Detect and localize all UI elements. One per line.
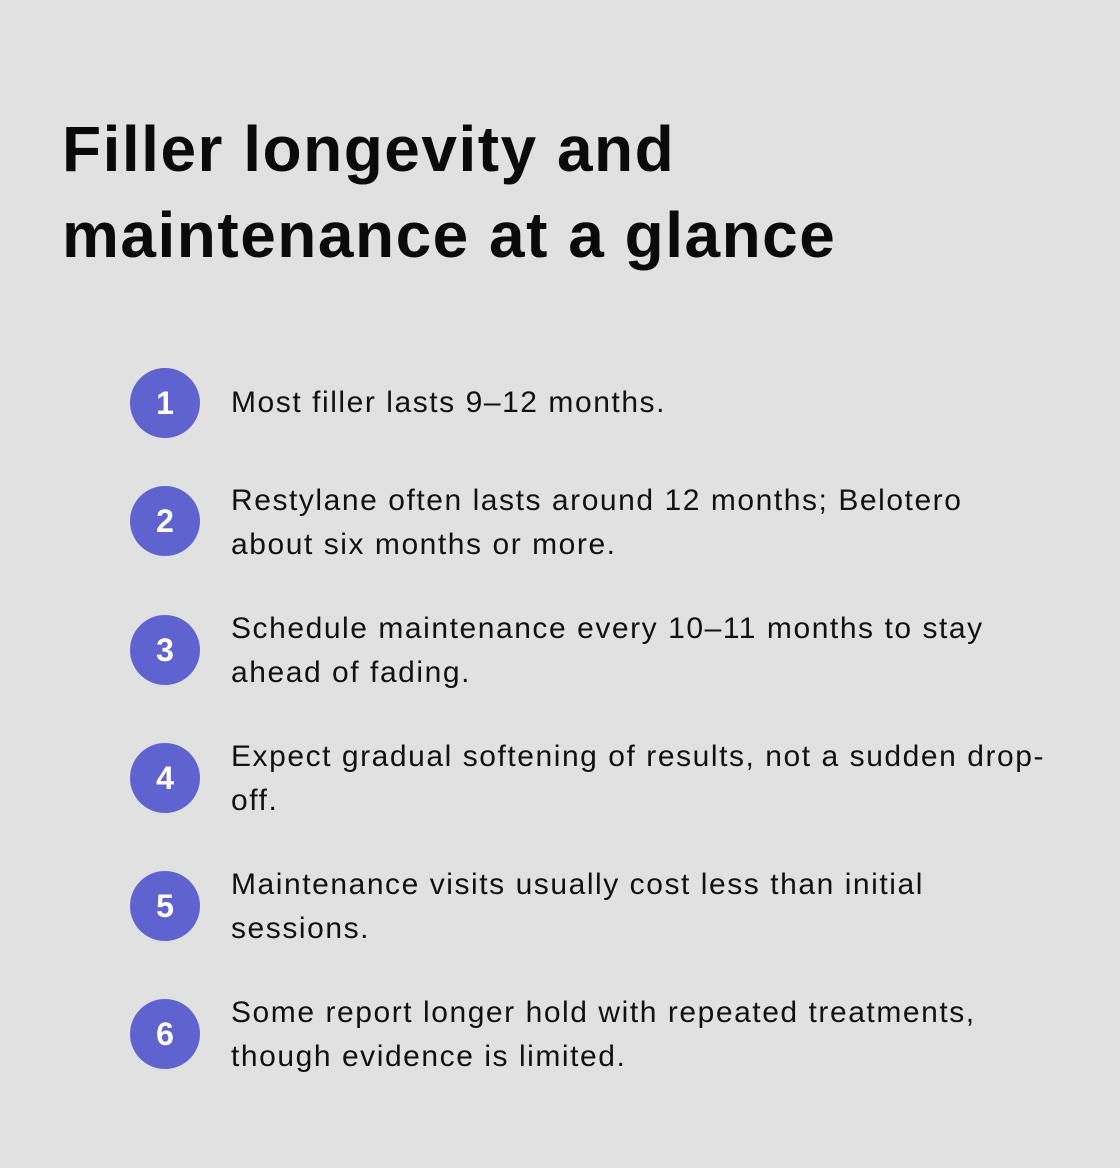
title: Filler longevity and bbox=[62, 113, 675, 185]
item 5 bbox=[130, 868, 924, 945]
badge 3: 3 bbox=[156, 632, 174, 668]
item 2 bbox=[130, 484, 962, 561]
item 5: sessions. bbox=[231, 912, 370, 945]
item 4: Expect gradual softening of results, not a sudden drop- bbox=[231, 740, 1045, 773]
title bbox=[62, 113, 836, 271]
badge 4 bbox=[130, 743, 200, 813]
badge 5 bbox=[130, 871, 200, 941]
item 1 bbox=[130, 368, 666, 438]
badge 6: 6 bbox=[156, 1016, 174, 1052]
item 4: off. bbox=[231, 784, 278, 817]
item 3: Schedule maintenance every 10–11 months to stay bbox=[231, 612, 984, 645]
item 6: Some report longer hold with repeated treatments, bbox=[231, 996, 976, 1029]
item 3 bbox=[130, 612, 984, 689]
badge 2: 2 bbox=[156, 503, 174, 539]
title: maintenance at a glance bbox=[62, 199, 836, 271]
item 3: ahead of fading. bbox=[231, 656, 471, 689]
badge 5: 5 bbox=[156, 888, 174, 924]
badge 2 bbox=[130, 486, 200, 556]
item 2: about six months or more. bbox=[231, 528, 617, 561]
item 5: Maintenance visits usually cost less than initial bbox=[231, 868, 924, 901]
badge 3 bbox=[130, 615, 200, 685]
item 6: though evidence is limited. bbox=[231, 1040, 626, 1073]
badge 6 bbox=[130, 999, 200, 1069]
item 6 bbox=[130, 996, 976, 1073]
item 2: Restylane often lasts around 12 months; Belotero bbox=[231, 484, 962, 517]
item 1: Most filler lasts 9–12 months. bbox=[231, 386, 666, 419]
badge 4: 4 bbox=[156, 760, 174, 796]
badge 1 bbox=[130, 368, 200, 438]
badge 1: 1 bbox=[156, 385, 174, 421]
item 4 bbox=[130, 740, 1045, 817]
